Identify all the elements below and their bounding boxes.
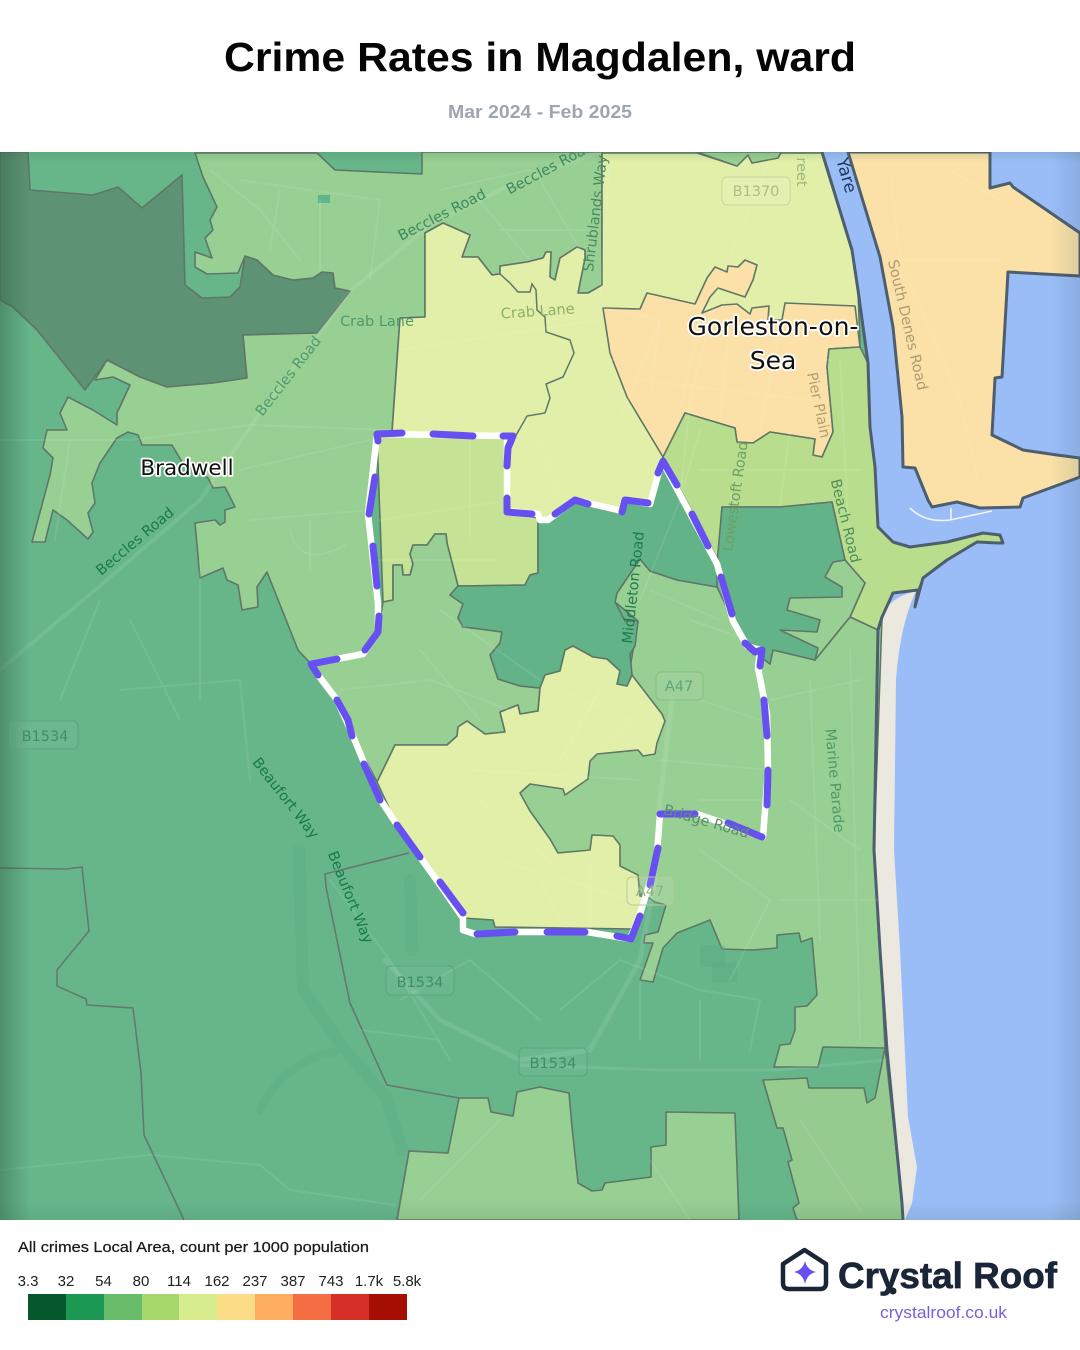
shield: B1534 west <box>10 721 78 749</box>
road shields <box>10 177 790 1076</box>
legend values <box>18 1273 422 1290</box>
logo wordmark: Crystal Roof <box>838 1255 1058 1296</box>
header <box>224 34 856 122</box>
region: central mid green <box>450 461 717 688</box>
divider: Crab Lane internal ward boundary <box>500 274 574 437</box>
base area: mid green wards <box>0 152 1080 1220</box>
label: Middleton Road: Middleton Road <box>620 531 648 644</box>
shield: B1534 west: B1534 <box>22 729 68 745</box>
woodland strips <box>260 195 737 1150</box>
legend values: 743 <box>318 1273 344 1290</box>
shield: A47 north <box>656 672 703 700</box>
outline: south-western ward boundaries <box>0 853 459 1220</box>
region: east mid green with docks <box>717 502 845 664</box>
label: Beccles Road mid: Beccles Road <box>253 334 325 419</box>
place: Gorleston-on-Sea: Gorleston-on- <box>688 312 858 341</box>
title: Crime Rates in Magdalen, ward <box>224 34 856 80</box>
icon: house with star <box>783 1250 826 1289</box>
label: Bridge Road: Bridge Road <box>661 802 751 842</box>
shield: B1534 centre <box>386 966 454 995</box>
region: Crab Lane yellow wards <box>392 153 860 520</box>
shield: B1534 east <box>519 1048 587 1076</box>
label: Beaufort Way south: Beaufort Way <box>324 849 376 946</box>
label: South Denes Road: South Denes Road <box>884 258 930 392</box>
place: Gorleston-on-Sea: Sea <box>750 346 796 375</box>
shield: A47 south <box>627 877 673 905</box>
label: street fragment: reet <box>793 157 809 187</box>
river and coast banks <box>822 152 1003 1220</box>
label: Marine Parade: Marine Parade <box>821 728 846 833</box>
label: Beccles Road south: Beccles Road <box>93 505 177 579</box>
region: Gorleston orange <box>603 260 860 457</box>
shield: B1370: B1370 <box>733 184 779 200</box>
logo: Crystal Roof <box>783 1250 1058 1322</box>
region: south-east coast light green <box>763 1048 903 1220</box>
region: north-east corner top patch <box>697 152 781 166</box>
region: lime north of ward centre <box>377 436 538 602</box>
label: Beaufort Way north: Beaufort Way <box>249 755 322 842</box>
region: south-east light green <box>510 559 885 1067</box>
legend values: 114 <box>167 1273 191 1290</box>
road labels <box>93 139 930 946</box>
choropleth map <box>0 152 1080 1220</box>
label: Crab Lane west: Crab Lane <box>340 314 414 330</box>
region: light green pocket beside docks <box>760 560 865 660</box>
region: south denes orange peninsula <box>848 152 1080 508</box>
region: lime east ward and harbour spit <box>663 347 1003 630</box>
legend scale <box>18 1273 422 1320</box>
legend values: 237 <box>242 1273 268 1290</box>
website url: crystalroof.co.uk <box>880 1304 1008 1322</box>
legend title: All crimes Local Area, count per 1000 population <box>18 1239 369 1256</box>
label: Crab Lane east: Crab Lane <box>500 301 575 323</box>
legend values: 387 <box>280 1273 306 1290</box>
place: Bradwell: Bradwell <box>140 456 234 481</box>
ward boundary: Magdalen <box>311 433 768 939</box>
boundary white base line <box>311 434 768 939</box>
boundary purple dashes <box>311 433 768 939</box>
legend values: 162 <box>204 1273 230 1290</box>
logo keyhole detail <box>890 1288 896 1294</box>
region: north-west light green <box>32 152 602 664</box>
label: Shrublands Way: Shrublands Way <box>581 154 611 273</box>
subtitle: date range: Mar 2024 - Feb 2025 <box>448 102 632 122</box>
place labels <box>140 312 858 481</box>
legend values: 80 <box>133 1273 149 1290</box>
label: Pier Plain: Pier Plain <box>803 371 833 440</box>
label: Beach Road: Beach Road <box>827 477 863 565</box>
edge shadows of map <box>0 152 1080 1220</box>
legend values: 32 <box>58 1273 74 1290</box>
shield: B1534 centre: B1534 <box>397 975 443 991</box>
road network <box>0 152 1000 1220</box>
legend values: 1.7k <box>355 1273 384 1290</box>
legend values: 54 <box>95 1273 112 1290</box>
beach strip <box>874 591 917 1220</box>
region: very low crime dark area <box>0 152 350 390</box>
region: southern yellow <box>377 646 665 929</box>
region: south light green polygon <box>397 1087 739 1220</box>
region: west ward light green <box>311 534 540 782</box>
legend colour bar <box>28 1294 407 1320</box>
label: Yare: Yare <box>831 155 860 195</box>
label: Beccles Road north: Beccles Road <box>396 186 489 244</box>
label: Lowestoft Road: Lowestoft Road <box>720 440 752 553</box>
shield: B1370 <box>722 177 790 205</box>
shield: A47 north: A47 <box>665 679 693 695</box>
footer <box>18 1239 1058 1322</box>
shield: B1534 east: B1534 <box>530 1056 576 1072</box>
legend values: 3.3 <box>18 1273 38 1290</box>
water: sea and river <box>822 152 1080 1220</box>
shield: A47 south: A47 <box>636 884 664 900</box>
legend values: 5.8k <box>393 1273 422 1290</box>
